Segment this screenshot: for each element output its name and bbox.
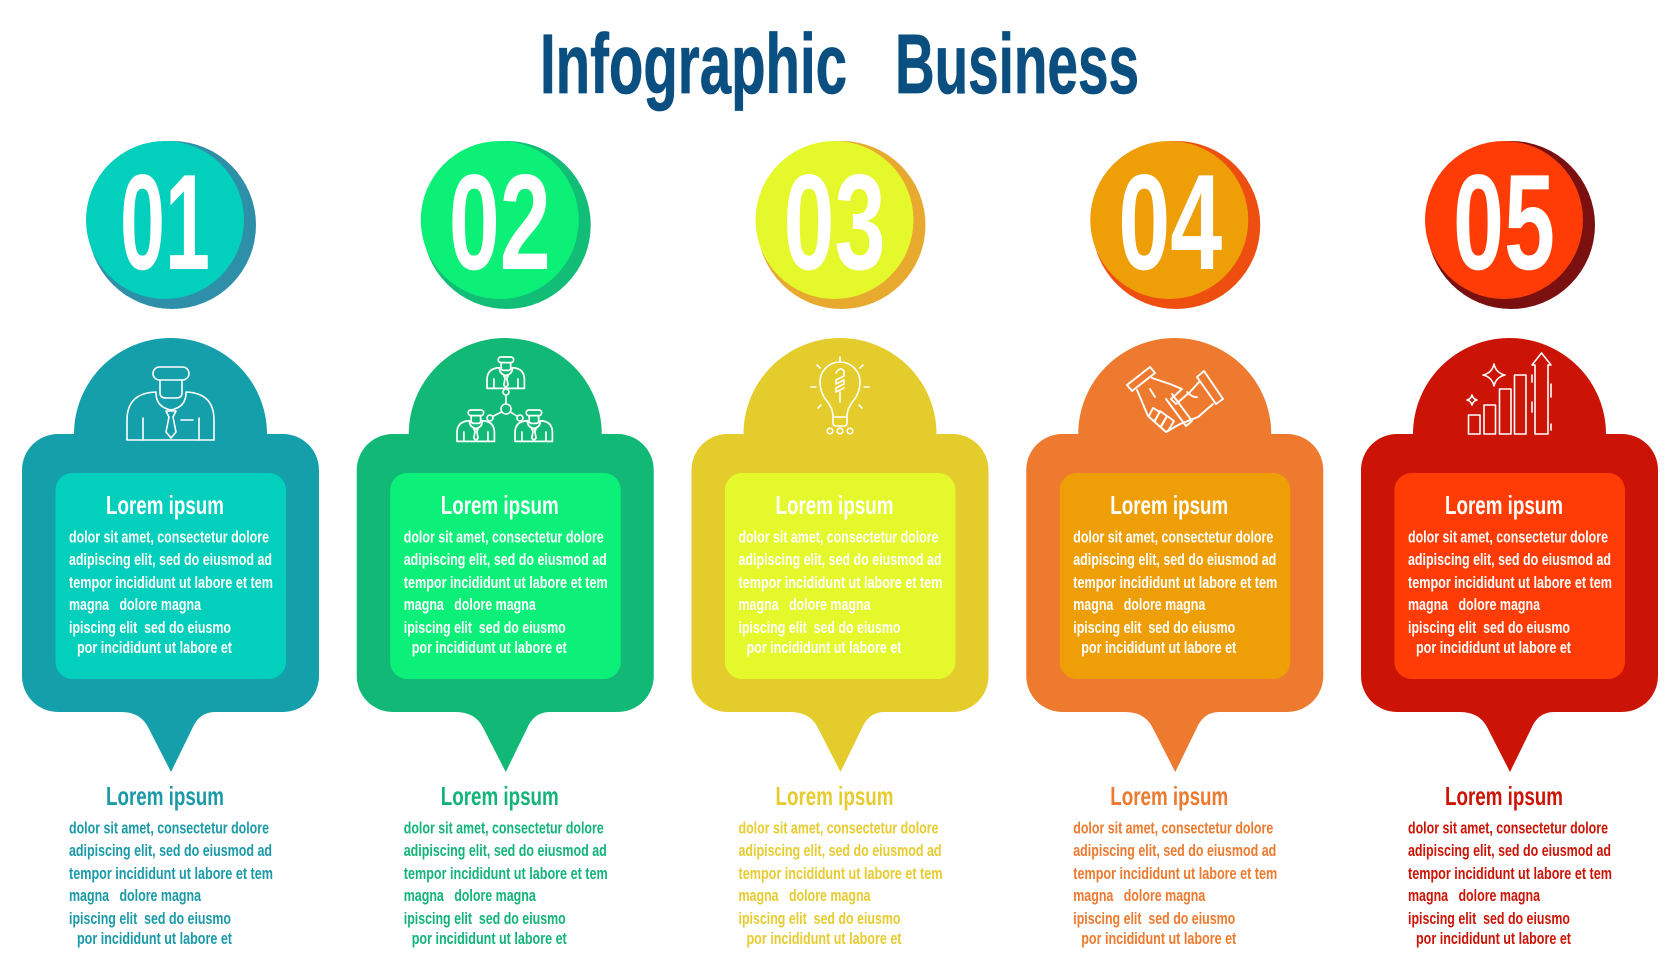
text below panel: Lorem ipsum [1110,781,1228,811]
text inside panel: magna dolore magna [1073,595,1206,614]
text below panel: tempor incididunt ut labore et tem [404,864,608,883]
text inside panel: adipiscing elit, sed do eiusmod ad [404,550,607,569]
icon: businessman [127,367,214,440]
text inside panel [738,490,942,657]
text below panel: ipiscing elit sed do eiusmo [738,909,900,928]
text below panel: Lorem ipsum [776,781,894,811]
text inside panel: Lorem ipsum [1445,490,1563,520]
text inside panel: dolor sit amet, consectetur dolore [404,528,604,546]
text below panel [69,781,273,948]
text below panel: dolor sit amet, consectetur dolore [1073,818,1273,838]
text inside panel: ipiscing elit sed do eiusmo [1073,618,1235,637]
text inside panel: magna dolore magna [738,595,871,614]
text below panel: ipiscing elit sed do eiusmo [69,909,231,928]
text below panel: por incididunt ut labore et [746,929,902,948]
text inside panel [1408,490,1612,657]
number badge 01 [86,141,256,309]
text below panel: magna dolore magna [1408,886,1540,905]
text below panel [1073,781,1277,948]
text inside panel: magna dolore magna [404,595,536,614]
text below panel: magna dolore magna [69,886,201,905]
text inside panel: dolor sit amet, consectetur dolore [738,528,938,546]
callout panel [692,338,988,772]
number badge 01: 01 [120,146,210,298]
text below panel: tempor incididunt ut labore et tem [738,864,942,883]
text below panel: adipiscing elit, sed do eiusmod ad [1073,841,1276,860]
text inside panel: Lorem ipsum [106,490,224,520]
column 3 [692,141,988,948]
text below panel: por incididunt ut labore et [1416,929,1571,948]
text below panel: magna dolore magna [1073,886,1206,905]
text inside panel: adipiscing elit, sed do eiusmod ad [1073,550,1276,569]
text below panel: ipiscing elit sed do eiusmo [404,909,566,928]
text below panel: dolor sit amet, consectetur dolore [404,818,604,838]
text inside panel: magna dolore magna [69,595,201,614]
title: Infographic [540,17,847,111]
number badge 02: 02 [449,146,551,298]
text inside panel: magna dolore magna [1408,595,1540,614]
title: Business [895,17,1139,111]
column 4 [1026,141,1323,948]
text below panel: adipiscing elit, sed do eiusmod ad [738,841,942,860]
text inside panel: dolor sit amet, consectetur dolore [1073,528,1273,546]
text inside panel: Lorem ipsum [776,490,894,520]
number badge 05: 05 [1453,146,1555,298]
text inside panel: ipiscing elit sed do eiusmo [69,618,231,637]
text inside panel: tempor incididunt ut labore et tem [404,573,608,592]
text below panel: tempor incididunt ut labore et tem [1408,864,1612,883]
text below panel [404,781,608,948]
column 1 [22,141,319,948]
text below panel: ipiscing elit sed do eiusmo [1073,909,1235,928]
text inside panel: Lorem ipsum [1110,490,1228,520]
callout panel [357,338,654,772]
text below panel: magna dolore magna [404,886,536,905]
text inside panel: dolor sit amet, consectetur dolore [69,528,269,546]
icon: team network [457,357,552,441]
number badge 03: 03 [784,146,886,298]
column 5 [1361,141,1658,948]
text below panel: Lorem ipsum [441,781,559,811]
text below panel: dolor sit amet, consectetur dolore [69,818,269,838]
text below panel: magna dolore magna [738,886,871,905]
text inside panel: por incididunt ut labore et [77,638,232,657]
icon: handshake [1127,367,1223,432]
text inside panel: por incididunt ut labore et [412,638,567,657]
text below panel: tempor incididunt ut labore et tem [69,864,273,883]
icon: growth chart [1467,353,1551,434]
text below panel [738,781,942,948]
text below panel: por incididunt ut labore et [77,929,232,948]
text inside panel: Lorem ipsum [441,490,559,520]
text below panel: Lorem ipsum [106,781,224,811]
text inside panel: por incididunt ut labore et [1081,638,1236,657]
text below panel: ipiscing elit sed do eiusmo [1408,909,1570,928]
callout panel [22,338,319,772]
text below panel: adipiscing elit, sed do eiusmod ad [69,841,272,860]
text inside panel: por incididunt ut labore et [746,638,902,657]
text inside panel [1073,490,1277,657]
text inside panel: tempor incididunt ut labore et tem [1408,573,1612,592]
text below panel: por incididunt ut labore et [1081,929,1236,948]
text inside panel [69,490,273,657]
text below panel [1408,781,1612,948]
callout panel [1361,338,1658,772]
text below panel: Lorem ipsum [1445,781,1563,811]
text inside panel: dolor sit amet, consectetur dolore [1408,528,1608,546]
text inside panel: adipiscing elit, sed do eiusmod ad [738,550,942,569]
text below panel: dolor sit amet, consectetur dolore [738,818,938,838]
text inside panel: ipiscing elit sed do eiusmo [1408,618,1570,637]
column 2 [357,141,654,948]
callout panel [1026,338,1323,772]
text inside panel: adipiscing elit, sed do eiusmod ad [69,550,272,569]
text below panel: dolor sit amet, consectetur dolore [1408,818,1608,838]
icon: light bulb [811,357,869,434]
text inside panel: tempor incididunt ut labore et tem [1073,573,1277,592]
text below panel: adipiscing elit, sed do eiusmod ad [404,841,607,860]
text inside panel: tempor incididunt ut labore et tem [738,573,942,592]
text inside panel: por incididunt ut labore et [1416,638,1571,657]
text inside panel: ipiscing elit sed do eiusmo [404,618,566,637]
number badge 04: 04 [1118,146,1222,298]
text below panel: por incididunt ut labore et [412,929,567,948]
text below panel: adipiscing elit, sed do eiusmod ad [1408,841,1611,860]
text inside panel: adipiscing elit, sed do eiusmod ad [1408,550,1611,569]
text below panel: tempor incididunt ut labore et tem [1073,864,1277,883]
text inside panel: ipiscing elit sed do eiusmo [738,618,900,637]
text inside panel [404,490,608,657]
text inside panel: tempor incididunt ut labore et tem [69,573,273,592]
